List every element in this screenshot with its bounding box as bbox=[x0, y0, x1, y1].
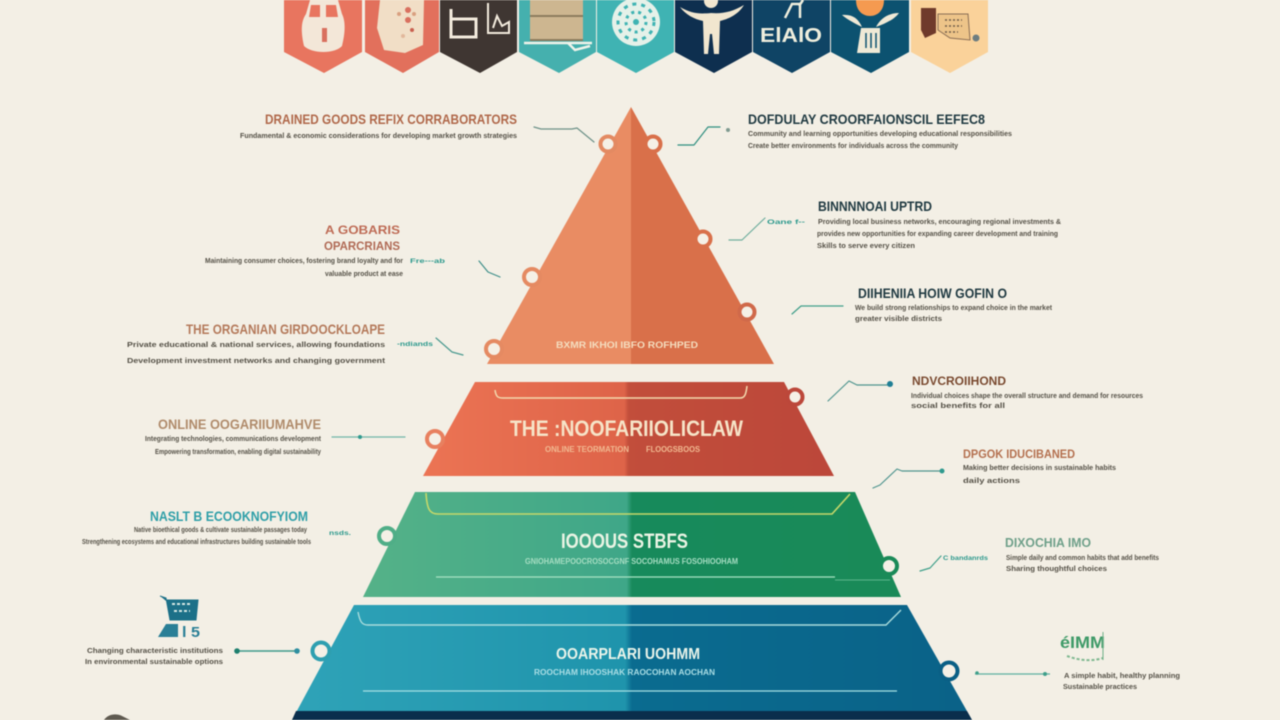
banner: padlock bbox=[284, 0, 362, 73]
right callout 3: We build strong relationships to expand choice in the market bbox=[855, 305, 1053, 312]
banner: textured scroll bbox=[365, 0, 439, 73]
banner: glyph word: ElAlO bbox=[760, 25, 822, 47]
right callout 7 with plant icon: Sustainable practices bbox=[1063, 684, 1137, 691]
left callout 3 bbox=[127, 321, 463, 365]
right callout 1: Create better environments for individuals across the community bbox=[748, 143, 958, 150]
icon: green plant: éIMM bbox=[1060, 633, 1105, 652]
left callout 5: nsds. bbox=[329, 530, 351, 537]
left callout 2: Fre---ab bbox=[410, 258, 445, 265]
connector bbox=[828, 381, 888, 401]
right callout 2: Providing local business networks, encouraging regional investments & bbox=[818, 219, 1061, 226]
right callout 1: Community and learning opportunities developing educational responsibilities bbox=[748, 131, 1012, 138]
connector bbox=[873, 469, 942, 488]
left callout 4: ONLINE OOGARIIUMAHVE bbox=[158, 416, 321, 432]
left callout 4: Empowering transformation, enabling digital sustainability bbox=[155, 449, 321, 456]
pyramid tier 1: apex triangle bbox=[487, 107, 774, 364]
banner: peach map bbox=[911, 0, 988, 73]
left callout 3: Development investment networks and changing government bbox=[127, 358, 386, 365]
banner: globe bbox=[597, 0, 674, 73]
right callout 4: Individual choices shape the overall structure and demand for resources bbox=[911, 393, 1143, 400]
right callout 4 bbox=[828, 374, 1143, 410]
banner: glyph word bbox=[753, 0, 830, 73]
right callout 2 bbox=[729, 198, 1061, 250]
connector bbox=[534, 127, 594, 142]
pyramid tier 3: green bbox=[363, 492, 901, 597]
left callout 2: Maintaining consumer choices, fostering brand loyalty and for bbox=[205, 258, 403, 265]
left callout 1: DRAINED GOODS REFIX CORRABORATORS bbox=[265, 111, 517, 127]
right callout 3: greater visible districts bbox=[855, 316, 942, 323]
right callout 6: Sharing thoughtful choices bbox=[1006, 566, 1107, 573]
icon: green plant bbox=[1060, 632, 1105, 660]
left callout 2 bbox=[205, 223, 500, 278]
banner: shelf bbox=[519, 0, 596, 73]
right callout 6: Simple daily and common habits that add benefits bbox=[1006, 555, 1159, 562]
tier 3 title: IOOOUS STBFS bbox=[561, 530, 688, 553]
right callout 5: DPGOK IDUCIBANED bbox=[963, 447, 1075, 461]
right callout 6 bbox=[920, 535, 1159, 573]
right callout 7 with plant icon: A simple habit, healthy planning bbox=[1064, 673, 1180, 680]
right callout 5: Making better decisions in sustainable habits bbox=[963, 465, 1116, 472]
connector bbox=[332, 436, 405, 438]
left callout 3: Private educational & national services, allowing foundations bbox=[127, 342, 385, 349]
left callout 6 with cart icon: In environmental sustainable options bbox=[85, 659, 223, 666]
right callout 2: BINNNNOAI UPTRD bbox=[818, 198, 932, 214]
tier 4 caption: ROOCHAM IHOOSHAK RAOCOHAN AOCHAN bbox=[534, 668, 715, 677]
tier connector nodes bbox=[312, 136, 958, 680]
right callout 2: Oane f-- bbox=[767, 219, 805, 226]
connector bbox=[920, 556, 941, 571]
banner: dark glyphs bbox=[440, 0, 517, 73]
connector bbox=[729, 218, 765, 240]
left callout 6 with cart icon: Changing characteristic institutions bbox=[87, 648, 223, 655]
left callout 1 bbox=[240, 111, 594, 142]
right callout 4: NDVCROIIHOND bbox=[912, 374, 1006, 388]
connector bbox=[479, 261, 500, 277]
connector bbox=[436, 338, 463, 355]
left callout 4 bbox=[145, 416, 405, 456]
icon: shopping cart: l 5 bbox=[182, 624, 200, 641]
left callout 2: A GOBARIS bbox=[325, 223, 400, 237]
right callout 5 bbox=[873, 447, 1116, 488]
connector bbox=[975, 673, 1050, 675]
tier 3 caption: GNIOHAMEPOOCROSOCGNF SOCOHAMUS FOSOHIOOHAM bbox=[525, 557, 738, 566]
pyramid tier 4: blue bbox=[292, 605, 972, 720]
right callout 6: DIXOCHIA IMO bbox=[1005, 535, 1091, 550]
right callout 3 bbox=[792, 285, 1053, 323]
connector bbox=[237, 650, 297, 652]
left callout 3: -ndiands bbox=[397, 341, 433, 348]
right callout 5: daily actions bbox=[963, 478, 1020, 485]
right callout 3: DIIHENIIA HOIW GOFIN O bbox=[858, 285, 1007, 301]
right callout 4: social benefits for all bbox=[911, 403, 1005, 410]
tier 2 caption: ONLINE TEORMATION bbox=[545, 445, 629, 454]
icon banner row bbox=[284, 0, 988, 73]
left callout 1: Fundamental & economic considerations for developing market growth strategies bbox=[240, 133, 517, 140]
right callout 1 bbox=[678, 111, 1012, 150]
tier 1 caption: BXMR IKHOI IBFO ROFHPED bbox=[556, 340, 699, 350]
pyramid tier 2: red bbox=[423, 382, 834, 476]
tier 4 title: OOARPLARI UOHMM bbox=[556, 646, 700, 663]
icon: corner figure bbox=[104, 714, 130, 720]
left callout 2: OPARCRIANS bbox=[324, 239, 400, 253]
banner: figure with orange bbox=[831, 0, 909, 73]
connector bbox=[792, 306, 843, 314]
right callout 7 with plant icon bbox=[975, 632, 1180, 691]
right callout 1: DOFDULAY CROORFAIONSCIL EEFEC8 bbox=[748, 111, 985, 127]
left callout 5: NASLT B ECOOKNOFYIOM bbox=[150, 508, 308, 524]
right callout 6: C bandanrds bbox=[943, 555, 988, 562]
right callout 2: Skills to serve every citizen bbox=[817, 243, 915, 250]
tier 2 title: THE :NOOFARIIOLICLAW bbox=[510, 416, 743, 441]
pyramid tier 2: red: FLOOGSBOOS bbox=[646, 445, 701, 454]
banner: person bbox=[675, 0, 752, 73]
left callout 6 with cart icon bbox=[85, 596, 300, 666]
icon: shopping cart bbox=[158, 596, 200, 641]
left callout 4: Integrating technologies, communications development bbox=[145, 436, 322, 443]
left callout 5 bbox=[82, 508, 351, 546]
left callout 5: Strengthening ecosystems and educational infrastructures building sustainable tools bbox=[82, 539, 311, 546]
left callout 3: THE ORGANIAN GIRDOOCKLOAPE bbox=[186, 321, 385, 337]
left callout 2: valuable product at ease bbox=[325, 271, 403, 278]
connector bbox=[678, 127, 720, 145]
base band bbox=[292, 711, 972, 720]
right callout 2: provides new opportunities for expanding career development and training bbox=[817, 231, 1058, 238]
left callout 5: Native bioethical goods & cultivate sustainable passages today bbox=[134, 527, 307, 534]
